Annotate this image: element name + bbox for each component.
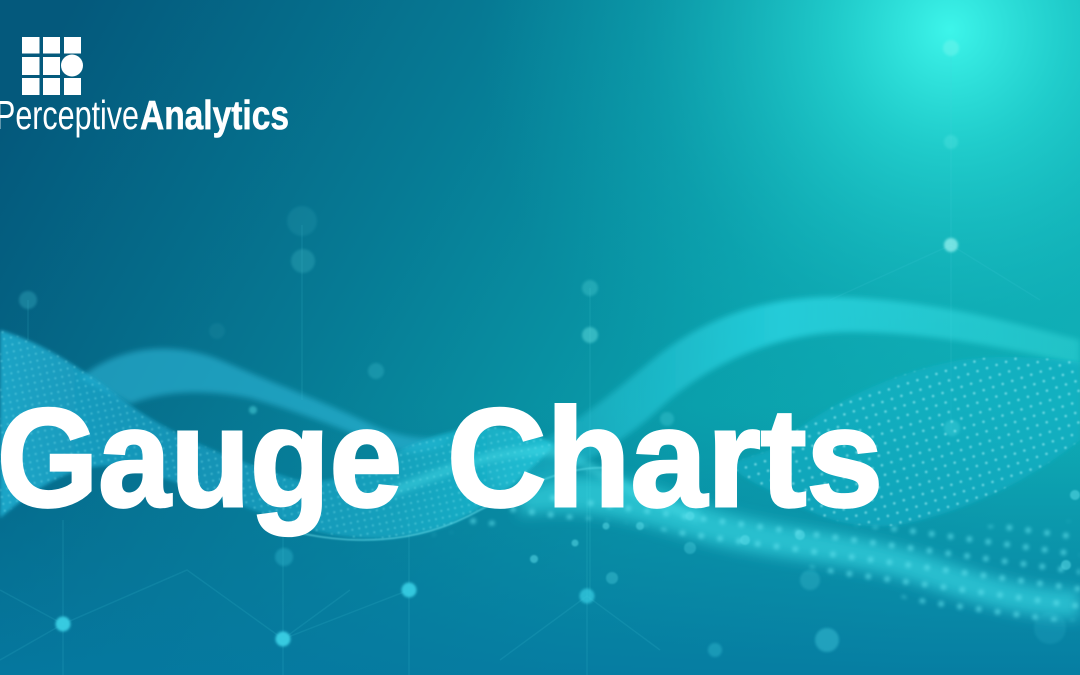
upper ribbon wave, right: [480, 297, 1080, 490]
right data mesh wave: [735, 357, 1080, 526]
left data mesh wave: [0, 330, 610, 540]
title: Charts: [447, 379, 883, 536]
logo wordmark: Perceptive: [0, 92, 139, 138]
logo mark: grid of squares with circle: [22, 37, 83, 95]
logo wordmark bold: Analytics: [140, 92, 289, 138]
upper ribbon wave, left: [80, 349, 450, 452]
logo: Perceptive Analytics: [0, 37, 289, 138]
scattered dots under the wave: [530, 490, 1080, 584]
title: Gauge: [0, 379, 402, 536]
lower glowing wave: [370, 451, 1080, 621]
